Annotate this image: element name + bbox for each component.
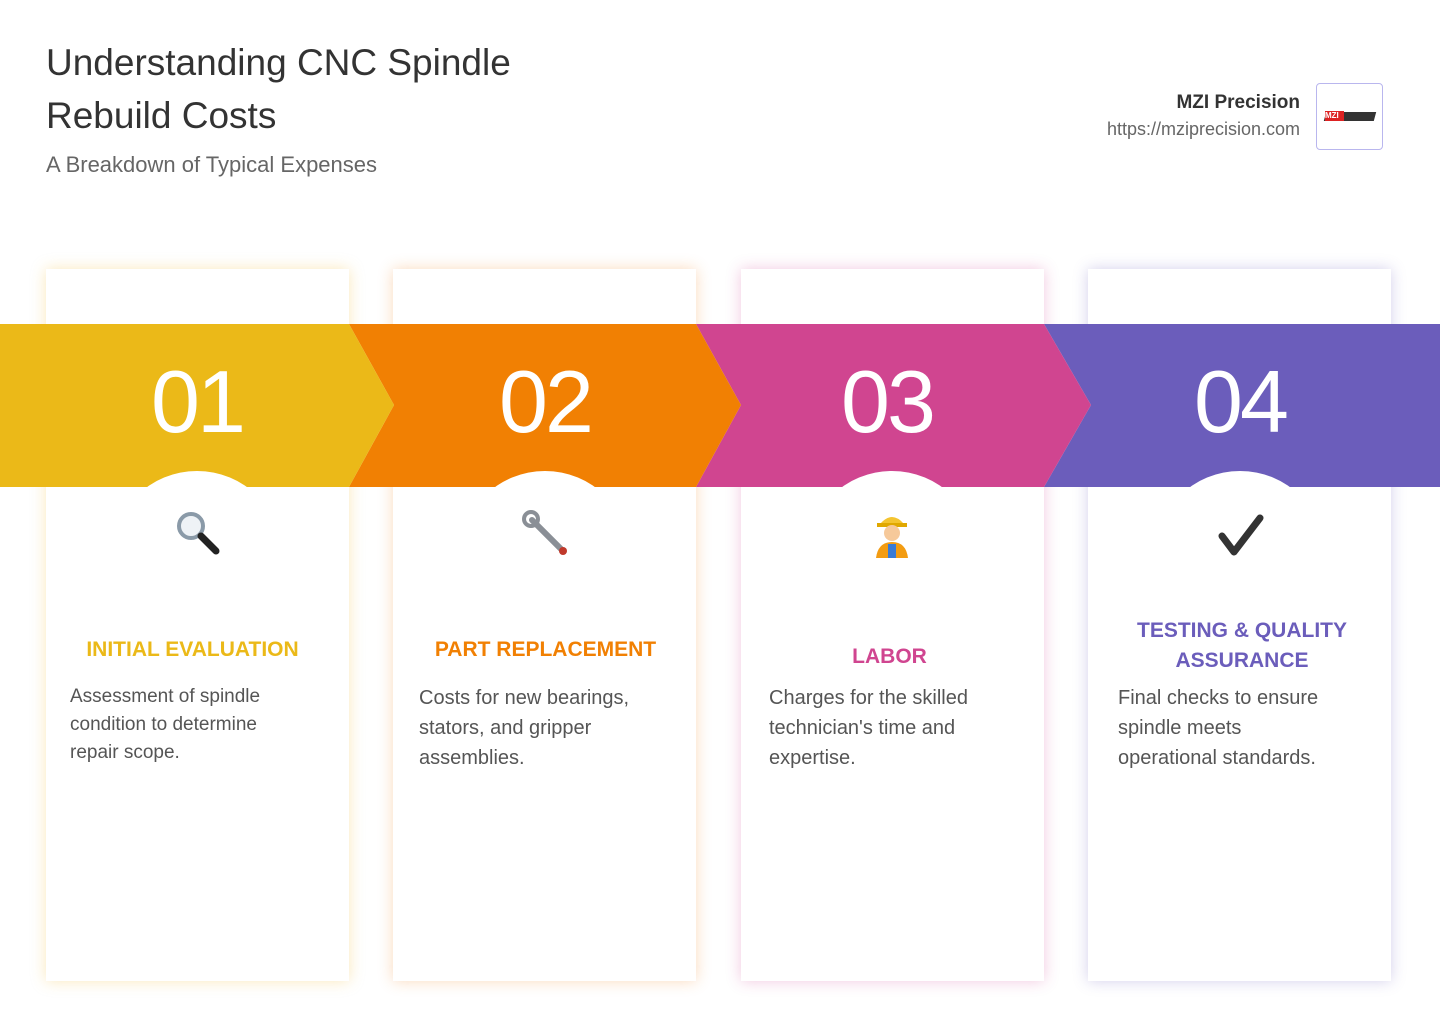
desc 3: Charges for the skilled <box>769 687 968 709</box>
step 3 text <box>769 645 968 769</box>
number 03: 03 <box>841 352 933 451</box>
heading 3: LABOR <box>852 645 927 668</box>
desc 4: spindle meets <box>1118 717 1241 739</box>
logo: MZI <box>1325 111 1339 120</box>
number 02: 02 <box>499 352 591 451</box>
title <box>46 42 511 136</box>
icon: worker <box>876 517 908 558</box>
desc 1 <box>70 686 260 763</box>
desc 2 <box>419 687 629 769</box>
card 4 <box>1088 269 1391 981</box>
title: Rebuild Costs <box>46 95 276 136</box>
heading 4: ASSURANCE <box>1175 649 1308 672</box>
desc 4: Final checks to ensure <box>1118 687 1318 709</box>
card 2 <box>393 269 696 981</box>
card 1 <box>46 269 349 981</box>
step 2 text <box>419 638 656 769</box>
icon: magnifier <box>177 512 220 554</box>
desc 4: operational standards. <box>1118 747 1316 769</box>
logo <box>1316 83 1383 150</box>
card 3 <box>741 269 1044 981</box>
brand url: https://mziprecision.com <box>1107 119 1300 139</box>
desc 2: Costs for new bearings, <box>419 687 629 709</box>
heading 4: TESTING & QUALITY <box>1137 619 1347 642</box>
heading 2: PART REPLACEMENT <box>435 638 656 661</box>
subtitle: A Breakdown of Typical Expenses <box>46 152 377 177</box>
number 01: 01 <box>151 352 243 451</box>
icon: check <box>1218 514 1264 556</box>
number 04: 04 <box>1194 352 1286 451</box>
brand block <box>1107 83 1383 150</box>
desc 3: expertise. <box>769 747 856 769</box>
step 1 text <box>70 638 299 763</box>
title: Understanding CNC Spindle <box>46 42 511 83</box>
icon: wrench <box>522 510 567 555</box>
desc 3 <box>769 687 968 769</box>
desc 1: Assessment of spindle <box>70 686 260 707</box>
desc 1: repair scope. <box>70 742 180 763</box>
desc 2: assemblies. <box>419 747 525 769</box>
desc 4 <box>1118 687 1318 769</box>
step 4 text <box>1118 619 1347 769</box>
heading 4 <box>1137 619 1347 672</box>
heading 1: INITIAL EVALUATION <box>86 638 299 661</box>
desc 2: stators, and gripper <box>419 717 591 739</box>
desc 1: condition to determine <box>70 714 257 735</box>
desc 3: technician's time and <box>769 717 955 739</box>
brand name: MZI Precision <box>1176 92 1300 113</box>
